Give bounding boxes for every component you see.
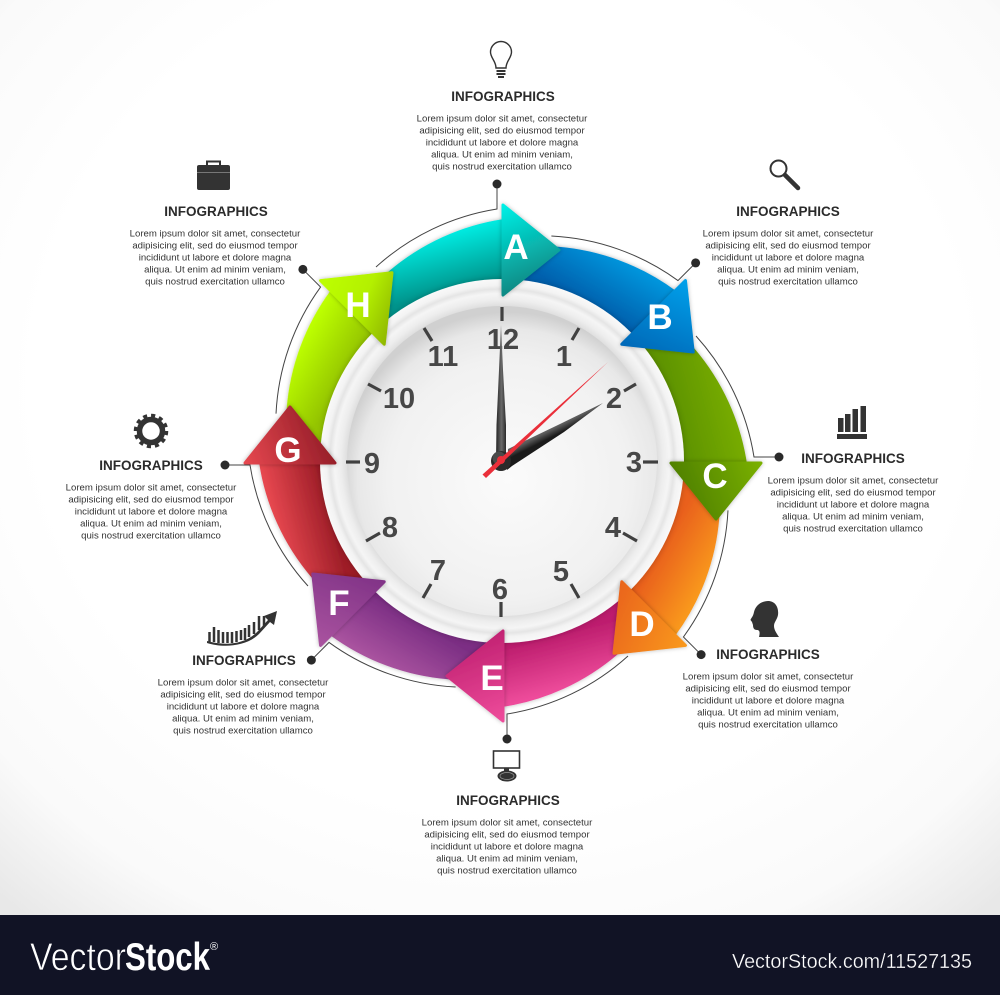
block G text: aliqua. Ut enim ad minim veniam,	[80, 518, 222, 530]
icon: monitor	[494, 751, 520, 782]
block E text: aliqua. Ut enim ad minim veniam,	[436, 854, 578, 864]
block F text: aliqua. Ut enim ad minim veniam,	[172, 714, 314, 724]
connector A	[376, 180, 502, 267]
block A text: incididunt ut labore et dolore magna	[426, 138, 579, 148]
block D text: adipisicing elit, sed do eiusmod tempor	[685, 684, 851, 694]
icon: bar chart	[837, 406, 867, 439]
block A text: quis nostrud exercitation ullamco	[432, 162, 572, 172]
block D text: aliqua. Ut enim ad minim veniam,	[697, 708, 839, 718]
block H text: adipisicing elit, sed do eiusmod tempor	[132, 240, 298, 252]
letter H: H	[345, 286, 371, 325]
head E	[447, 631, 503, 721]
connector G	[220, 460, 308, 586]
block D text: incididunt ut labore et dolore magna	[692, 696, 845, 706]
letter B: B	[647, 298, 673, 337]
block H text: aliqua. Ut enim ad minim veniam,	[144, 264, 286, 276]
block A text: Lorem ipsum dolor sit amet, consectetur	[417, 114, 588, 124]
block F text: Lorem ipsum dolor sit amet, consectetur	[158, 678, 329, 688]
block C text	[768, 451, 939, 534]
block E text: Lorem ipsum dolor sit amet, consectetur	[422, 818, 593, 828]
letter C: C	[702, 457, 728, 496]
icon: magnifier	[770, 160, 798, 188]
head B	[622, 281, 725, 384]
block B text: adipisicing elit, sed do eiusmod tempor	[705, 240, 871, 252]
block H text: Lorem ipsum dolor sit amet, consectetur	[130, 228, 301, 240]
block B text	[703, 204, 874, 288]
pivot	[491, 451, 511, 471]
block F text: incididunt ut labore et dolore magna	[167, 702, 320, 712]
block F text	[158, 653, 329, 736]
block D text: quis nostrud exercitation ullamco	[698, 720, 838, 730]
block H text	[130, 204, 301, 288]
letter A: A	[503, 228, 529, 267]
icon: growth chart	[207, 611, 277, 646]
clock numerals	[364, 324, 642, 606]
band F purple	[330, 550, 503, 723]
block E text: adipisicing elit, sed do eiusmod tempor	[424, 830, 590, 840]
minute hand	[496, 325, 506, 462]
letter D: D	[629, 605, 655, 644]
block H text: quis nostrud exercitation ullamco	[145, 276, 285, 288]
footer bar: ®	[210, 941, 218, 953]
arrow ring bands	[243, 203, 763, 723]
block H text: INFOGRAPHICS	[164, 204, 268, 219]
band D orange	[590, 463, 763, 636]
block E text: incididunt ut labore et dolore magna	[431, 842, 584, 852]
band G red	[259, 462, 379, 587]
block C text: INFOGRAPHICS	[801, 451, 905, 466]
block G text: quis nostrud exercitation ullamco	[81, 530, 221, 542]
block C text: Lorem ipsum dolor sit amet, consectetur	[768, 476, 939, 486]
band E pink	[502, 587, 627, 707]
clock numerals: 6	[492, 574, 508, 606]
band A teal	[379, 219, 504, 339]
block B text: quis nostrud exercitation ullamco	[718, 276, 858, 288]
clock hands	[482, 325, 608, 478]
clock rim	[320, 279, 684, 643]
block A text: aliqua. Ut enim ad minim veniam,	[431, 150, 573, 160]
block D text: Lorem ipsum dolor sit amet, consectetur	[683, 672, 854, 682]
letter F: F	[328, 584, 350, 623]
block C text: quis nostrud exercitation ullamco	[783, 524, 923, 534]
clock tick marks	[346, 307, 658, 617]
head C	[671, 463, 761, 519]
clock numerals: 5	[553, 556, 569, 588]
clock numerals: 11	[428, 341, 458, 373]
block A text: adipisicing elit, sed do eiusmod tempor	[419, 126, 585, 136]
block F text: quis nostrud exercitation ullamco	[173, 726, 313, 736]
head D	[582, 582, 685, 685]
clock numerals: 3	[626, 447, 642, 479]
block G text: adipisicing elit, sed do eiusmod tempor	[68, 494, 234, 506]
block A text	[417, 89, 588, 172]
block E text: quis nostrud exercitation ullamco	[437, 866, 577, 876]
head F	[281, 542, 384, 645]
arrow letters	[274, 228, 728, 698]
block C text: adipisicing elit, sed do eiusmod tempor	[770, 488, 936, 498]
block B text: Lorem ipsum dolor sit amet, consectetur	[703, 228, 874, 240]
block A text: INFOGRAPHICS	[451, 89, 555, 104]
block E text	[422, 793, 593, 876]
icon: briefcase	[197, 162, 230, 190]
connector B	[551, 174, 702, 325]
block F text: adipisicing elit, sed do eiusmod tempor	[160, 690, 326, 700]
block B text: INFOGRAPHICS	[736, 204, 840, 219]
clock numerals: 1	[556, 341, 572, 373]
hour hand	[507, 403, 603, 470]
band B blue	[503, 203, 676, 376]
block H text: incididunt ut labore et dolore magna	[139, 252, 292, 264]
icon: head silhouette	[750, 601, 779, 637]
band H lime	[243, 290, 416, 463]
block D text: INFOGRAPHICS	[716, 647, 820, 662]
head G	[245, 407, 335, 463]
clock numerals: 2	[606, 383, 622, 415]
clock body	[320, 279, 684, 643]
connector E	[502, 656, 628, 744]
connector D	[639, 510, 790, 661]
footer url: VectorStock.com/11527135	[732, 951, 972, 973]
footer logo: Vector	[30, 936, 126, 979]
clock numerals: 12	[487, 324, 519, 356]
icon: light bulb	[490, 42, 512, 77]
icon: gear	[136, 416, 166, 446]
block G text: Lorem ipsum dolor sit amet, consectetur	[66, 482, 237, 494]
clock numerals: 9	[364, 448, 380, 480]
block G text: incididunt ut labore et dolore magna	[75, 506, 228, 518]
band C green	[627, 339, 747, 464]
block B text: incididunt ut labore et dolore magna	[712, 252, 865, 264]
clock numerals: 7	[430, 555, 446, 587]
clock numerals: 8	[382, 512, 398, 544]
block E text: INFOGRAPHICS	[456, 793, 560, 808]
letter G: G	[274, 431, 302, 470]
connector F	[305, 598, 456, 749]
block G text: INFOGRAPHICS	[99, 458, 203, 473]
head H	[321, 241, 424, 344]
block G text	[66, 458, 237, 542]
block D text	[683, 647, 854, 730]
footer bar	[0, 915, 1000, 995]
block C text: aliqua. Ut enim ad minim veniam,	[782, 512, 924, 522]
connector H	[214, 263, 365, 414]
footer bar: Stock	[125, 936, 210, 979]
clock numerals: 10	[383, 383, 415, 415]
clock face	[347, 306, 657, 616]
block C text: incididunt ut labore et dolore magna	[777, 500, 930, 510]
arrow heads	[245, 205, 761, 721]
head A	[503, 205, 559, 295]
connector lines and dots	[214, 174, 790, 749]
clock numerals: 4	[605, 512, 621, 544]
second hand	[482, 362, 608, 478]
block B text: aliqua. Ut enim ad minim veniam,	[717, 264, 859, 276]
connector C	[696, 336, 784, 462]
letter E: E	[480, 659, 504, 698]
block F text: INFOGRAPHICS	[192, 653, 296, 668]
